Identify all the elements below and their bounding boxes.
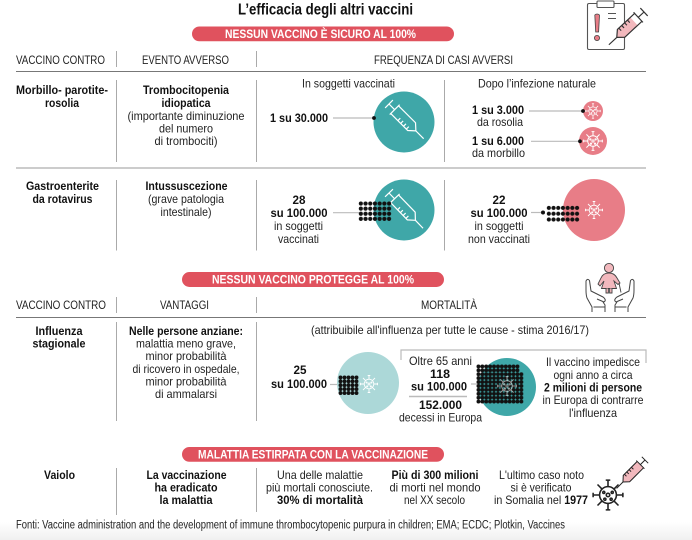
vaccinated frequency: 1 su 30.000: 1 su 30.000 (270, 111, 328, 125)
table header: section 2: VACCINO CONTRO (16, 298, 106, 312)
fact: 300 million deaths: nel XX secolo (404, 493, 465, 507)
unvaccinated: 22 su 100.000: in soggetti (474, 219, 524, 233)
natural infection frequency (472, 76, 607, 160)
vaccinated frequency: 1 su 30.000: In soggetti vaccinati (302, 76, 395, 90)
callout: vaccine prevents 2 million: Il vaccino impedisce (546, 355, 640, 369)
fact: last case 1977: L'ultimo caso noto (499, 468, 584, 482)
heading pill: malattia estirpata: MALATTIA ESTIRPATA CON LA VACCINAZIONE (198, 447, 428, 461)
row: vantaggi text: di ricovero in ospedale, (132, 362, 240, 376)
icon: clipboard with syringe (588, 1, 649, 50)
bottom background fade (0, 522, 692, 540)
mortality: over 65: 118 (430, 367, 450, 381)
vaccinated: 28 su 100.000 (270, 180, 434, 246)
row: eradicated text: ha eradicato (154, 480, 218, 494)
row: trombocitopenia text: (importante diminuzione (128, 109, 245, 123)
row: vantaggi text: Nelle persone anziane: (129, 324, 243, 338)
row: gastroenterite label: da rotavirus (32, 192, 93, 206)
fact: last case 1977 (494, 468, 588, 507)
sources: Fonti: Vaccine administration and the development of immune thrombocytopenic purpura in children; EMA; ECDC; Plotkin, Vaccines (16, 520, 565, 532)
table header: section 1: VACCINO CONTRO (16, 53, 105, 67)
mortality: 25 su 100.000: 25 (294, 363, 307, 377)
fact: mortality 30%: Una delle malattie (277, 468, 363, 482)
natural infection frequency: Dopo l’infezione naturale (478, 76, 596, 90)
unvaccinated: 22 su 100.000: 22 (492, 193, 506, 207)
row: intussuscezione text: (grave patologia (148, 192, 224, 206)
fact: 300 million deaths (390, 468, 481, 507)
row: intussuscezione text (146, 179, 228, 219)
vaccinated frequency: 1 su 30.000 (270, 76, 434, 152)
mortality subtitle: (attribuibile all'influenza per tutte le cause - stima 2016/17) (311, 323, 589, 337)
mortality: 25 su 100.000: su 100.000 (271, 377, 327, 391)
mortality: over 65 (399, 354, 536, 424)
row: eradicated text: la malattia (160, 493, 213, 507)
row: trombocitopenia text: di trombociti) (154, 134, 218, 148)
fact: mortality 30%: 30% di mortalità (277, 493, 363, 507)
natural infection frequency: 1 su 6.000 (472, 134, 524, 148)
title: L’efficacia degli altri vaccini (238, 2, 413, 18)
unvaccinated: 22 su 100.000: su 100.000 (470, 206, 528, 220)
mortality: over 65: 152.000 (419, 398, 462, 412)
mortality: 25 su 100.000 (271, 352, 399, 414)
natural infection frequency: da rosolia (477, 115, 523, 129)
mortality: over 65: decessi in Europa (399, 410, 482, 424)
vaccinated: 28 su 100.000: in soggetti (274, 219, 323, 233)
row: vaiolo label: Vaiolo (44, 468, 75, 482)
row: morbillo label (16, 83, 108, 110)
icon: virus with syringe (593, 456, 649, 510)
table header: section 2 (16, 297, 646, 318)
row: trombocitopenia text (128, 83, 245, 148)
callout: vaccine prevents 2 million: l'influenza (569, 406, 617, 420)
row: morbillo label: rosolia (45, 96, 79, 110)
mortality: over 65: su 100.000 (411, 380, 467, 394)
unvaccinated: 22 su 100.000 (468, 179, 625, 246)
fact: last case 1977: in Somalia nel 1977 (494, 493, 588, 507)
row: trombocitopenia text: del numero (159, 122, 213, 136)
vaccinated: 28 su 100.000: vaccinati (278, 232, 319, 246)
callout: vaccine prevents 2 million (542, 355, 644, 420)
natural infection frequency: 1 su 3.000 (472, 103, 524, 117)
heading pill: nessun vaccino è sicuro: NESSUN VACCINO È SICURO AL 100% (225, 26, 416, 41)
row: vantaggi text: minor probabilità (146, 374, 227, 388)
fact: 300 million deaths: Più di 300 milioni (392, 468, 478, 482)
row: intussuscezione text: Intussuscezione (146, 179, 228, 193)
row: vantaggi text: malattia meno grave, (136, 336, 236, 350)
icon: elderly person in hands (586, 263, 634, 312)
row: vantaggi text: di ammalarsi (155, 387, 217, 401)
table header: section 2: VANTAGGI (160, 298, 209, 312)
table header: section 2: MORTALITÀ (421, 297, 477, 312)
row: influenza label: stagionale (32, 336, 86, 350)
callout: vaccine prevents 2 million: in Europa di contrarre (542, 393, 644, 407)
row: vantaggi text (129, 324, 243, 401)
fact: last case 1977: si è verificato (510, 480, 572, 494)
row: trombocitopenia text: idiopatica (162, 96, 211, 110)
table header: section 1 (16, 51, 646, 72)
mortality: over 65: Oltre 65 anni (409, 354, 472, 368)
row: vantaggi text: minor probabilità (146, 349, 227, 363)
row: trombocitopenia text: Trombocitopenia (143, 83, 229, 97)
row: intussuscezione text: intestinale) (160, 205, 212, 219)
natural infection frequency: da morbillo (472, 146, 525, 160)
row: influenza label: Influenza (36, 324, 83, 338)
unvaccinated: 22 su 100.000: non vaccinati (468, 232, 530, 246)
vaccinated: 28 su 100.000: 28 (292, 193, 306, 207)
fact: 300 million deaths: di morti nel mondo (390, 480, 481, 494)
row: influenza label (32, 324, 86, 350)
row: eradicated text: La vaccinazione (146, 468, 227, 482)
fact: mortality 30% (266, 468, 373, 507)
table header: section 1: FREQUENZA DI CASI AVVERSI (374, 53, 513, 67)
row: gastroenterite label: Gastroenterite (26, 179, 99, 193)
fact: mortality 30%: più mortali conosciute. (266, 480, 373, 494)
bracket (401, 350, 646, 363)
callout: vaccine prevents 2 million: 2 milioni di persone (544, 380, 642, 394)
table header: section 1: EVENTO AVVERSO (142, 53, 229, 67)
row: gastroenterite label (26, 179, 99, 206)
row: eradicated text (146, 468, 227, 507)
callout: vaccine prevents 2 million: ogni anno a circa (554, 368, 633, 382)
heading pill: nessun vaccino protegge: NESSUN VACCINO PROTEGGE AL 100% (212, 273, 414, 287)
vaccinated: 28 su 100.000: su 100.000 (270, 206, 328, 220)
row: morbillo label: Morbillo- parotite- (16, 83, 108, 97)
